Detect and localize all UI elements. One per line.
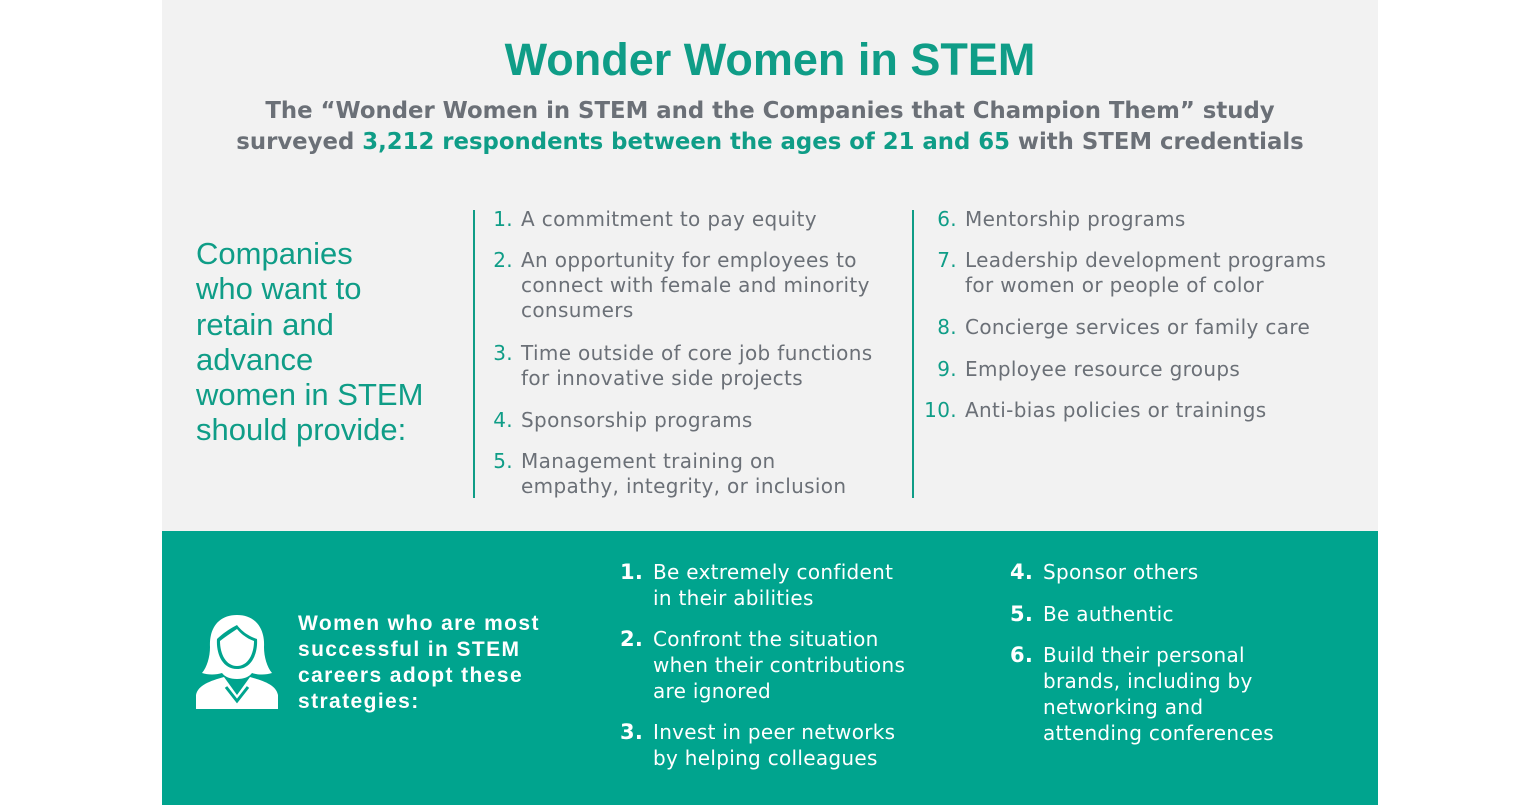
bottom panel: 2. (620, 627, 643, 651)
bottom panel: 4. (1010, 560, 1033, 584)
list column 1: Sponsorship programs (521, 408, 753, 432)
list column 2: Employee resource groups (965, 357, 1240, 381)
list column 1: Management training on (521, 449, 776, 473)
strategies column 1 (620, 560, 905, 770)
strategies column 2: Build their personal (1043, 643, 1245, 667)
strategies heading: successful in STEM (298, 638, 520, 661)
top panel: 2. (493, 248, 513, 272)
strategies column 1: when their contributions (653, 653, 905, 677)
list column 1: An opportunity for employees to (521, 248, 857, 272)
strategies column 2: networking and (1043, 695, 1203, 719)
left heading: who want to (196, 271, 361, 306)
strategies heading (298, 612, 540, 713)
strategies heading: careers adopt these (298, 664, 523, 687)
top panel: 1. (493, 207, 513, 231)
top panel: 7. (937, 248, 957, 272)
list column 1: for innovative side projects (521, 366, 803, 390)
subtitle: The “Wonder Women in STEM and the Companies that Champion Them” study (265, 98, 1275, 124)
list column 2: Leadership development programs (965, 248, 1326, 272)
list column 2: Anti-bias policies or trainings (965, 398, 1267, 422)
strategies heading: strategies: (298, 690, 420, 713)
left heading: retain and (196, 307, 334, 342)
list column 1: connect with female and minority (521, 273, 870, 297)
bottom panel: 6. (1010, 643, 1033, 667)
strategies column 2: Sponsor others (1043, 560, 1198, 584)
strategies heading: Women who are most (298, 612, 540, 635)
strategies column 1: are ignored (653, 679, 771, 703)
divider lines (473, 210, 475, 498)
top panel (162, 0, 1378, 531)
list column 2: Mentorship programs (965, 207, 1186, 231)
list column 1: A commitment to pay equity (521, 207, 817, 231)
strategies column 2 (1010, 560, 1274, 745)
list column 1 (493, 207, 873, 498)
strategies column 2: Be authentic (1043, 602, 1174, 626)
strategies column 1: Confront the situation (653, 627, 879, 651)
bottom panel: 5. (1010, 602, 1033, 626)
list column 2: for women or people of color (965, 273, 1264, 297)
title: Wonder Women in STEM (505, 34, 1035, 85)
bottom panel (162, 531, 1378, 805)
list column 2 (924, 207, 1326, 422)
top panel: 8. (937, 315, 957, 339)
strategies column 1: Invest in peer networks (653, 720, 895, 744)
strategies column 2: attending conferences (1043, 721, 1274, 745)
top panel: 3. (493, 341, 513, 365)
bottom panel: 3. (620, 720, 643, 744)
top panel: 6. (937, 207, 957, 231)
list column 1: consumers (521, 298, 634, 322)
icon: woman (196, 615, 278, 709)
list column 1: empathy, integrity, or inclusion (521, 474, 846, 498)
strategies column 1: Be extremely confident (653, 560, 893, 584)
strategies column 1: in their abilities (653, 586, 814, 610)
subtitle: surveyed 3,212 respondents between the ages of 21 and 65 with STEM credentials (236, 129, 1304, 155)
top panel: 4. (493, 408, 513, 432)
list column 1: Time outside of core job functions (521, 341, 873, 365)
top panel: 9. (937, 357, 957, 381)
top panel: 10. (924, 398, 957, 422)
top panel: 5. (493, 449, 513, 473)
left heading (196, 236, 423, 447)
subtitle (236, 98, 1304, 155)
strategies column 1: by helping colleagues (653, 746, 878, 770)
left heading: advance (196, 342, 313, 377)
strategies column 2: brands, including by (1043, 669, 1253, 693)
list column 2: Concierge services or family care (965, 315, 1310, 339)
bottom panel: 1. (620, 560, 643, 584)
left heading: women in STEM (196, 377, 423, 412)
left heading: should provide: (196, 412, 406, 447)
left heading: Companies (196, 236, 353, 271)
